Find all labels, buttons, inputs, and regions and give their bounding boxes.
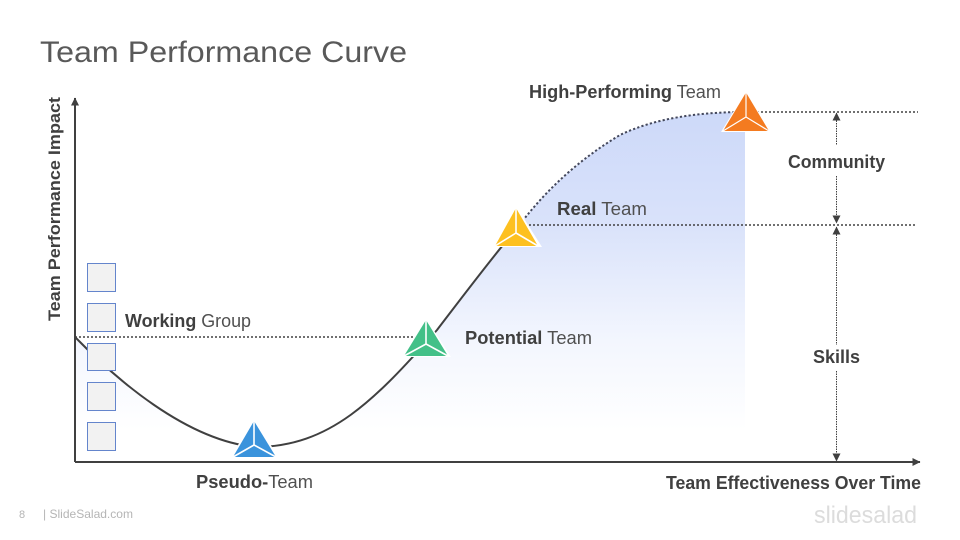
dotted guide lines [75, 112, 918, 337]
icon: orange triangle [721, 91, 771, 132]
shaded area under curve [75, 112, 745, 462]
footer site text: | SlideSalad.com [43, 507, 133, 521]
label: skills: Skills [813, 347, 860, 367]
icon: blue triangle [230, 419, 279, 458]
axes [75, 98, 920, 462]
x axis label: Team Effectiveness Over Time [666, 473, 921, 493]
member squares [88, 264, 116, 450]
label: real team: Real Team [557, 199, 647, 219]
label: pseudo-team: Pseudo-Team [196, 472, 313, 492]
vertical range arrows [836, 113, 838, 461]
label: community: Community [788, 152, 885, 172]
label: working group: Working Group [125, 311, 251, 331]
title: Team Performance Curve [40, 36, 407, 69]
footer logo wordmark: slidesalad [814, 502, 917, 529]
icon: yellow triangle [492, 206, 542, 247]
icon: green triangle [401, 318, 451, 357]
label: high-performing team: High-Performing Team [529, 82, 721, 102]
label: potential team: Potential Team [465, 328, 592, 348]
performance curve [75, 112, 745, 447]
page number: 8 [19, 509, 25, 521]
y axis label: Team Performance Impact [45, 97, 64, 321]
